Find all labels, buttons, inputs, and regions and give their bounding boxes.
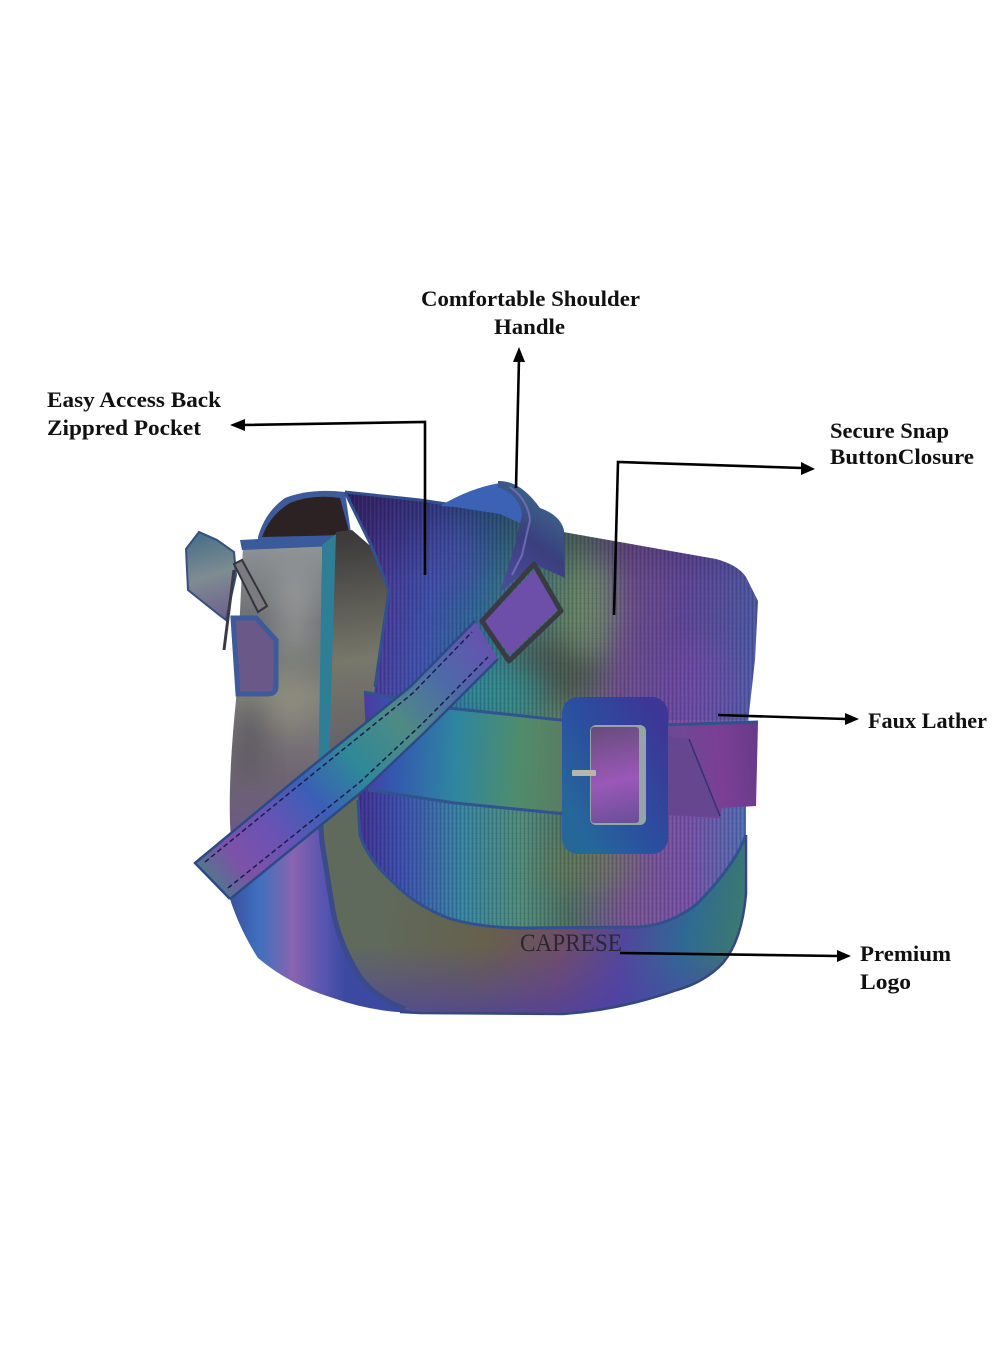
strap through buckle [591, 727, 639, 823]
arrow: premium logo [620, 950, 851, 962]
arrow: faux leather [718, 713, 859, 725]
label: premium logo: Premium [860, 941, 951, 966]
back rim of the bag [258, 491, 352, 545]
rectangular buckle [562, 697, 668, 854]
label: premium logo: Logo [860, 969, 911, 994]
teal gusset strip [318, 532, 345, 800]
left strap tab and hardware [186, 532, 276, 694]
brand logo: CAPRESE [520, 930, 622, 957]
blue top rim of gusset [240, 535, 336, 550]
label: secure snap button closure: Secure Snap [830, 418, 949, 443]
zip seam [320, 815, 405, 1009]
arrow: back zipped pocket [230, 419, 425, 575]
belt, left section [364, 692, 570, 812]
label: premium logo [860, 941, 951, 994]
strap stitching [205, 632, 488, 888]
label: secure snap button closure [830, 418, 974, 469]
lower side panel [226, 810, 420, 1013]
long diagonal shoulder strap [195, 621, 498, 899]
upper shoulder strap [498, 481, 565, 592]
product photo: iridescent crossbody bag [186, 481, 760, 1020]
inner pocket panel [328, 530, 389, 800]
arrow: snap button closure [614, 462, 815, 615]
belt edge lines [364, 692, 570, 814]
label: easy access back zipped pocket: Easy Access Back [47, 387, 222, 412]
upper strap back loop [440, 483, 524, 525]
arrow: shoulder handle [513, 347, 525, 488]
buckle pin [572, 770, 596, 776]
label: comfortable shoulder handle: Handle [494, 314, 565, 339]
strap edge [195, 621, 498, 899]
purple strap keeper [484, 570, 558, 655]
belt fold [660, 735, 720, 816]
dark bag interior [262, 497, 350, 537]
buckle opening [590, 725, 646, 825]
label: comfortable shoulder handle: Comfortable Shoulder [421, 286, 640, 311]
front panel bottom edge [400, 835, 746, 1014]
textured flap [340, 488, 760, 935]
olive front panel [316, 790, 750, 1020]
label: easy access back zipped pocket: Zippred Pocket [47, 415, 202, 440]
silver side gusset [230, 546, 322, 832]
label: faux lather: Faux Lather [868, 708, 987, 733]
label: comfortable shoulder handle [421, 286, 640, 339]
gunmetal strap buckle [482, 564, 561, 661]
belt, right section [660, 723, 758, 818]
flap outline [345, 492, 746, 928]
label: secure snap button closure: ButtonClosure [830, 444, 974, 469]
label: easy access back zipped pocket [47, 387, 222, 440]
